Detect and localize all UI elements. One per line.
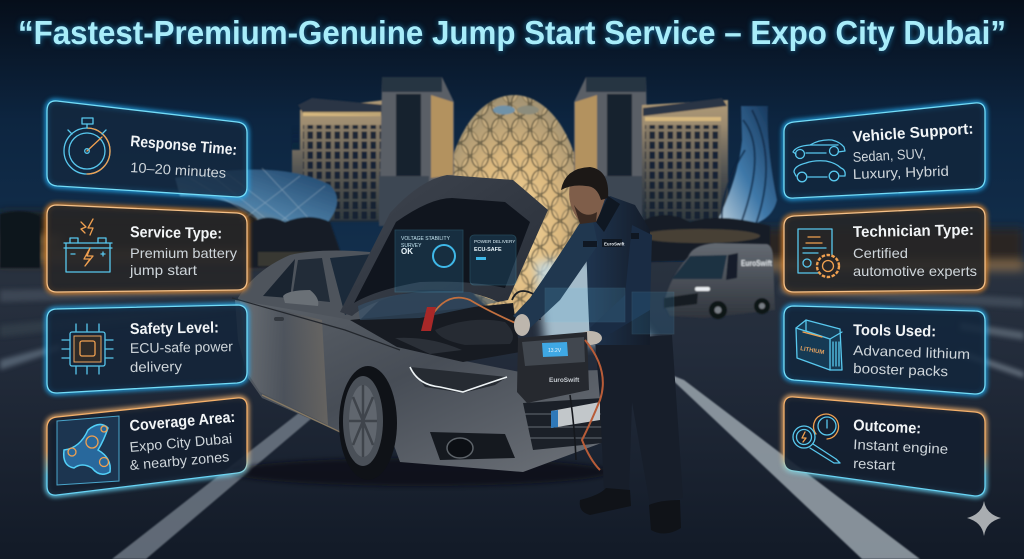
value: technician type: Certified [853,245,908,261]
front bumper details [523,398,603,450]
icon: coverage map [57,416,119,485]
panel: tools used [784,306,985,394]
twisted tower [715,106,777,226]
car body [235,300,604,472]
van lettering: EuroSwift [741,259,772,268]
heading: tools used: Tools Used: [853,322,936,340]
icon: certificate and gear [798,229,839,277]
windscreen reflection [358,291,498,320]
left hotel wing [292,98,385,222]
car shadow [230,458,610,486]
value: service type line 2: jump start [129,262,197,278]
bonnet hologram display: POWER DELIVERY [474,239,515,244]
wave pavilion [175,168,337,224]
door panel [240,300,328,425]
value: tools used: Advanced lithium [853,342,970,362]
face [569,178,606,222]
heading: safety level: Safety Level: [130,319,219,338]
bright road glow behind technician [535,258,655,345]
booster pack: EuroSwift [549,377,580,384]
open bonnet [340,175,548,316]
license plate [551,402,600,428]
hands [514,314,530,336]
panel: response time [47,101,247,197]
wheel [339,366,397,480]
hair [561,167,608,200]
trees and palms [248,217,345,268]
icon: battery with sparks [64,219,112,272]
left central block [379,77,454,226]
heading: coverage area: Coverage Area: [129,409,236,435]
car cabin [238,251,380,340]
booster cables [428,298,520,325]
panel: technician type [784,207,985,292]
icon: ECU chip [62,324,113,374]
booster pack: 13.2V [548,348,562,354]
car with open bonnet [230,175,610,486]
bonnet hologram display: ECU-SAFE [474,247,502,253]
icon: lithium booster pack [796,320,842,370]
service van [664,243,775,319]
background: road surface [0,212,1024,559]
panel: safety level [47,305,247,393]
background: night sky [0,0,1024,300]
panel: service type [47,205,247,292]
dome [446,95,582,315]
headlight [410,367,507,393]
icon: lithium booster pack: LITHIUM [800,346,825,356]
torso [585,196,650,345]
value: tools used line 2: booster packs [853,360,948,379]
icon: power button and key [793,414,840,463]
suit collar [596,196,620,232]
boots [580,488,631,515]
heading: service type: Service Type: [130,224,222,243]
icon: stopwatch [64,118,110,174]
icon: sparkle watermark [967,501,1001,536]
panel: coverage area [47,398,247,495]
heading: response time: Response Time: [130,133,238,159]
icon: sedan and SUV outlines [793,140,845,182]
right central block [574,77,650,236]
heading: vehicle support: Vehicle Support: [852,121,974,146]
heading: outcome: Outcome: [853,417,922,438]
fog lamp [430,432,515,460]
value: technician type line 2: automotive experts [853,263,977,279]
value: vehicle support: Sedan, SUV, [852,145,926,165]
value: coverage area: Expo City Dubai [129,430,233,455]
technician [513,167,683,534]
value: response time: 10–20 minutes [130,159,227,181]
bonnet hologram display [395,230,516,292]
panel: vehicle support [784,103,985,198]
suit badges [602,239,622,247]
technician: EuroSwift [604,242,625,246]
arm hologram [545,288,674,334]
door handle [274,317,284,321]
value: safety level line 2: delivery [130,358,182,375]
engine bay [350,303,520,362]
value: safety level: ECU-safe power [130,338,233,356]
red clamp [421,307,436,331]
value: service type: Premium battery [130,245,237,261]
booster pack [517,332,603,470]
heading: technician type: Technician Type: [853,222,974,241]
bonnet hologram display: OK [401,247,413,256]
panel: outcome [784,397,985,496]
side windows [263,259,295,298]
bonnet hologram display: SURVEY [401,243,422,249]
background: Expo City buildings and Al Wasl dome [0,77,777,315]
right hotel wing [642,98,728,222]
legs [595,335,683,505]
left arm [513,207,598,328]
road lane stripes [112,372,920,559]
value: outcome: Instant engine [853,436,949,457]
bonnet hologram display: VOLTAGE STABILITY [401,236,451,242]
value: coverage area line 2: & nearby zones [129,448,230,473]
side mirror [283,290,318,306]
value: vehicle support line 2: Luxury, Hybrid [853,163,949,182]
right arm [590,225,652,340]
value: outcome line 2: restart [853,455,896,473]
